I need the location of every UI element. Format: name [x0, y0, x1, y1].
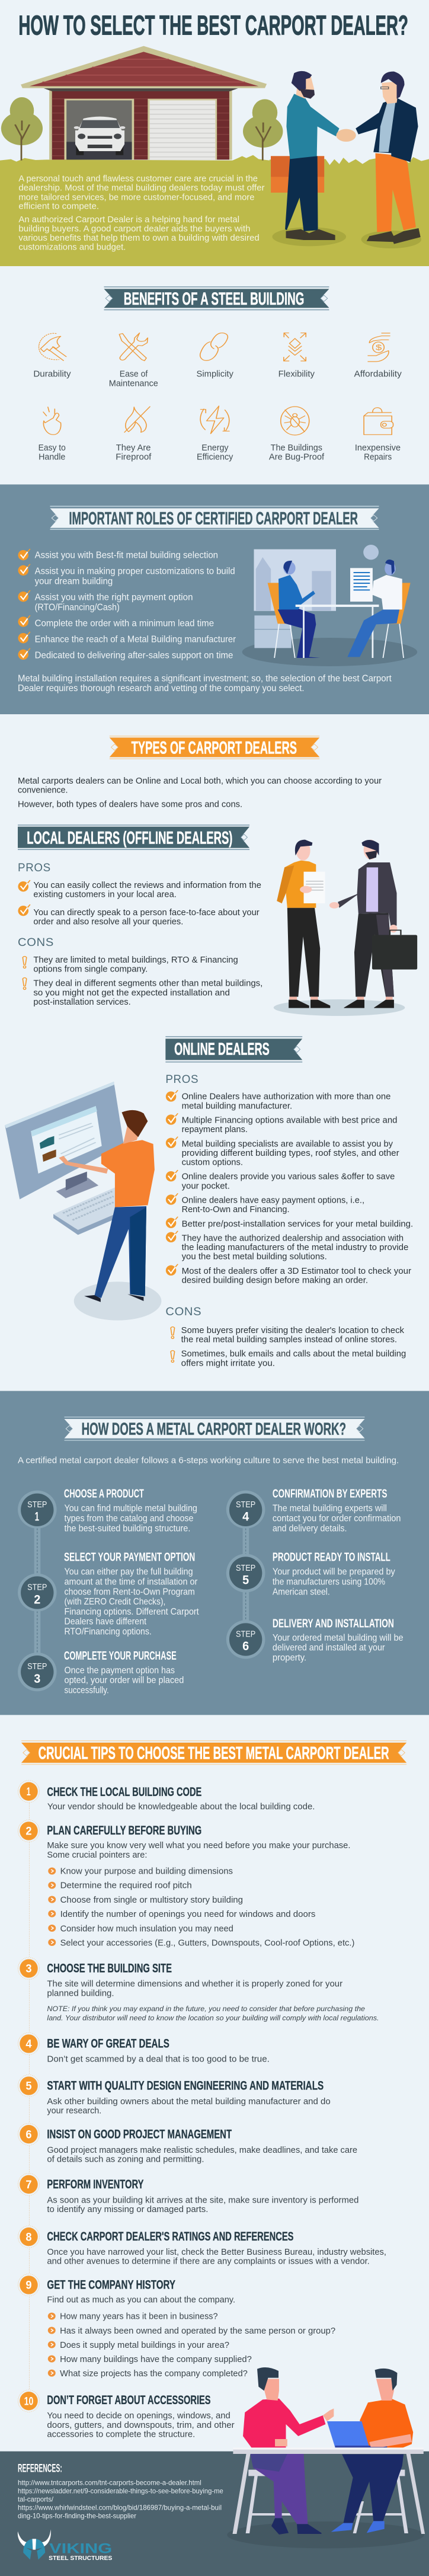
list: online pros: Online dealers have easy payment options, i.e.,	[182, 1195, 364, 1205]
list: local cons: options from single company.	[33, 964, 148, 974]
icon: office meeting	[242, 545, 417, 666]
tip 4: Don’t get scammed by a deal that is too good to be true.	[47, 2054, 270, 2064]
step text 4: and delivery details.	[273, 1523, 347, 1533]
stools	[246, 2470, 408, 2533]
text block: types intro	[18, 776, 382, 809]
list: online pros	[166, 1090, 413, 1285]
tip 10: 10	[24, 2395, 33, 2407]
step connectors	[34, 1527, 249, 1655]
tip 1	[18, 1781, 315, 1811]
icon: durability hammer	[39, 333, 66, 360]
tip 2: Some crucial pointers are:	[47, 1850, 147, 1859]
step badge 5: 5	[242, 1572, 249, 1587]
tip 9: How many years has it been in business?	[60, 2311, 218, 2321]
text block: reference links: https://www.whirlwindsteel.com/blog/bid/186987/buying-a-metal-buil	[18, 2504, 222, 2512]
labels: benefits: Repairs	[364, 452, 392, 462]
text block: intro: An authorized Carport Dealer is a helping hand for metal	[18, 215, 239, 224]
icon: affordability hands: $	[376, 343, 382, 352]
right person	[327, 2369, 413, 2533]
list: dealer roles: (RTO/Financing/Cash)	[35, 602, 120, 612]
tip 1: 1	[27, 1785, 31, 1798]
panel: hero scene	[0, 46, 429, 266]
text block: intro: building buyers. A good carport dealer aids the buyers with	[18, 223, 250, 234]
icon: fireproof	[124, 407, 150, 432]
tip 9: Does it supply metal buildings in your area?	[60, 2340, 229, 2350]
icon: no bugs	[281, 407, 309, 435]
labels: benefits: Inexpensive	[355, 443, 401, 452]
labels: benefits: Simplicity	[197, 369, 233, 379]
text block: intro: more tailored services, be more customer-focused, and more	[18, 192, 255, 202]
tip 8: 8	[25, 2230, 32, 2243]
panel: important roles	[0, 484, 429, 714]
panel: local dealers	[18, 824, 417, 1085]
tip 7: to identify any missing or damaged parts.	[47, 2204, 208, 2214]
icon: man in navy jacket	[356, 72, 421, 248]
logo: Viking Steel Structures: VIKING	[49, 2540, 112, 2556]
icon: garage building	[21, 46, 267, 159]
labels: benefits: Maintenance	[109, 378, 158, 388]
tip 5	[18, 2075, 331, 2115]
text block: reference links: https://newsladder.net/9-considerable-things-to-see-before-buying-me	[18, 2488, 223, 2495]
step text 6	[273, 1617, 404, 1663]
labels: benefits: Affordability	[354, 369, 402, 379]
step text 4	[273, 1487, 401, 1533]
left person	[243, 2367, 334, 2535]
list: online pros: custom options.	[182, 1157, 243, 1167]
list: dealer roles: Dedicated to delivering after-sales support on time	[35, 650, 233, 660]
list: local cons: post-installation services.	[33, 997, 131, 1006]
step badge 3	[18, 1653, 57, 1691]
icon: maintenance tools	[119, 333, 148, 361]
labels: benefits: Efficiency	[197, 452, 233, 462]
step text 1: the best-suited building structure.	[65, 1523, 190, 1533]
list: online pros: metal building manufacturer.	[182, 1101, 292, 1111]
step text 3	[64, 1650, 184, 1695]
heading: local cons: CONS	[18, 936, 54, 948]
step 2	[18, 1551, 199, 1637]
list: dealer roles: Complete the order with a minimum lead time	[35, 618, 214, 628]
icon: easy to handle	[43, 407, 61, 434]
list: local pros: You can easily collect the reviews and information from the	[33, 880, 261, 890]
tip 2: Identify the number of openings you need for windows and doors	[60, 1909, 315, 1919]
tip 10: doors, gutters, and downspouts, trim, and other	[47, 2420, 235, 2430]
step text 1	[64, 1487, 197, 1533]
tip 4: BE WARY OF GREAT DEALS	[47, 2035, 169, 2050]
icon: energy bolt	[200, 406, 229, 434]
step badge 5: STEP	[236, 1563, 255, 1573]
list: online pros: your pocket.	[182, 1181, 230, 1191]
heading banner: roles	[50, 506, 379, 530]
logo: Viking Steel Structures	[18, 2529, 112, 2561]
tip 10: DON’T FORGET ABOUT ACCESSORIES	[47, 2392, 211, 2407]
tip 9: GET THE COMPANY HISTORY	[47, 2277, 175, 2291]
step badge 1	[18, 1491, 57, 1529]
heading banner: benefits	[104, 286, 329, 310]
tip 6: of details such as zoning and permitting.	[47, 2154, 204, 2164]
step text 2: SELECT YOUR PAYMENT OPTION	[64, 1551, 195, 1564]
step text 3: successfully.	[65, 1685, 109, 1695]
list: dealer roles: Assist you with the right payment option	[35, 592, 193, 602]
tip 7: PERFORM INVENTORY	[47, 2177, 144, 2191]
list: local cons: They are limited to metal buildings, RTO & Financing	[33, 955, 238, 964]
list: online pros: Rent-to-Own and Financing.	[182, 1204, 290, 1214]
heading banner: online dealers: ONLINE DEALERS	[174, 1040, 270, 1059]
labels: benefits: Energy	[201, 443, 229, 452]
list: local pros: order and also resolve all your queries.	[33, 916, 183, 926]
labels: benefits: Ease of	[120, 369, 148, 379]
text block: intro	[18, 174, 265, 252]
labels: benefits: The Buildings	[271, 443, 322, 452]
step text 2: choose from Rent-to-Own Program	[65, 1586, 195, 1597]
heading: online cons: CONS	[165, 1305, 201, 1318]
text block: intro: dealership. Most of the metal building dealers today must offer	[18, 183, 265, 193]
text block: intro: A personal touch and flawless customer care are crucial in the	[18, 174, 258, 183]
icon: flexibility arrows	[284, 333, 306, 361]
list: online pros: you the best metal building solutions.	[182, 1251, 327, 1261]
icon: man at monitor	[5, 1082, 161, 1321]
labels: benefits	[33, 369, 402, 462]
step text 6: property.	[273, 1653, 306, 1663]
list: online pros: desired building design before making an order.	[182, 1275, 368, 1285]
icon: affordability hands	[368, 333, 390, 362]
icon row: line icons	[39, 333, 393, 435]
tip 9: Has it always been owned and operated by the same person or group?	[60, 2326, 335, 2335]
step text 2	[64, 1551, 199, 1637]
panel: types of carport dealers	[18, 736, 382, 809]
tip 2	[18, 1820, 354, 1948]
icon: two people at a table	[227, 2367, 425, 2548]
step text 1: types from the catalog and choose	[65, 1513, 193, 1523]
step text 2: You can either pay the full building	[65, 1567, 193, 1577]
list: online pros: repayment plans.	[182, 1124, 248, 1134]
tip 7: 7	[25, 2178, 32, 2191]
step text 3: Once the payment option has	[65, 1665, 175, 1675]
tip 5: Ask other building owners about the metal building manufacturer and do	[47, 2096, 331, 2106]
list: local cons	[23, 955, 262, 1006]
step badge 6: 6	[242, 1638, 249, 1653]
heading banner: local dealers	[18, 824, 249, 850]
panel: benefits of a steel building	[33, 286, 402, 462]
step badge 2: STEP	[27, 1582, 47, 1592]
heading: online pros: PROS	[165, 1073, 199, 1085]
tip 4	[18, 2032, 270, 2064]
icon: wallet	[364, 408, 393, 434]
step badge 1: STEP	[27, 1500, 47, 1509]
list: dealer roles	[18, 549, 236, 660]
step badge 6: STEP	[236, 1629, 255, 1639]
tip 3	[18, 1957, 379, 2022]
step 6	[226, 1617, 404, 1663]
text block: types intro: However, both types of dealers have some pros and cons.	[18, 799, 242, 809]
tip 10	[18, 2390, 235, 2439]
list: dealer roles: Assist you in making proper customizations to build	[35, 565, 235, 576]
text block: reference links: http://www.tntcarports.com/tnt-carports-become-a-dealer.html	[18, 2479, 201, 2487]
text block: reference links	[18, 2479, 223, 2520]
tip 7	[18, 2174, 358, 2214]
heading banner: how it works	[65, 1417, 364, 1441]
step 4	[226, 1487, 401, 1533]
step badge 2	[18, 1574, 57, 1612]
step 3	[18, 1650, 184, 1695]
tip 2: Determine the required roof pitch	[60, 1880, 192, 1890]
tip 10: You need to decide on openings, windows, and	[47, 2411, 230, 2420]
panel: how a dealer works: COMPLETE YOUR PURCHASE	[64, 1650, 177, 1663]
tip 6: 6	[25, 2128, 32, 2140]
tip 5: your research.	[47, 2105, 101, 2115]
labels: benefits: Flexibility	[278, 369, 315, 379]
panel: crucial tips	[18, 1740, 406, 2439]
panel: footer	[0, 2367, 429, 2576]
text block: selection note	[18, 673, 392, 693]
tip 10: accessories to complete the structure.	[47, 2429, 195, 2439]
tip 9	[18, 2274, 335, 2378]
tip 2: 2	[25, 1824, 32, 1837]
text block: intro: efficient to compete.	[18, 201, 99, 211]
step badge 3: 3	[34, 1671, 40, 1686]
step 5	[226, 1551, 395, 1597]
logo: Viking Steel Structures: STEEL STRUCTURES	[49, 2555, 112, 2561]
text block: intro: customizations and budget.	[18, 242, 126, 252]
tip 6: INSIST ON GOOD PROJECT MANAGEMENT	[47, 2127, 232, 2142]
tip 3: CHOOSE THE BUILDING SITE	[47, 1960, 172, 1975]
labels: benefits: Durability	[33, 369, 71, 379]
step text 3: opted, your order will be placed	[65, 1675, 184, 1685]
icon: two businessmen	[274, 840, 417, 1016]
tip 2: Consider how much insulation you may need	[60, 1923, 233, 1933]
step badge 3: STEP	[27, 1661, 47, 1671]
tip 3: 3	[25, 1962, 32, 1975]
step text 2: Dealers have different	[65, 1616, 147, 1626]
step text 2: (with ZERO Credit Checks),	[65, 1596, 165, 1606]
list: local pros: existing customers in your local area.	[33, 889, 177, 899]
tip 9: 9	[25, 2278, 32, 2291]
list: dealer roles: Enhance the reach of a Metal Building manufacturer	[35, 634, 236, 644]
text block: reference links: ding-10-tips-for-finding-the-best-supplier	[18, 2512, 136, 2520]
heading banner: online dealers	[165, 1036, 302, 1062]
labels: benefits: Fireproof	[116, 452, 151, 462]
panel: how a dealer works	[0, 1391, 429, 1715]
icon: bearded man with briefcase	[271, 71, 356, 246]
tip 2: PLAN CAREFULLY BEFORE BUYING	[47, 1823, 201, 1837]
text block: intro: various benefits that help them to own a building with desired	[18, 233, 260, 242]
step badge 4	[226, 1491, 265, 1529]
tip 3: planned building.	[47, 1988, 114, 1998]
labels: benefits: Are Bug-Proof	[269, 452, 324, 462]
text block: types intro: convenience.	[18, 785, 68, 795]
step text 1: CHOOSE A PRODUCT	[64, 1487, 144, 1501]
text block: reference links: tal-carports/	[18, 2496, 54, 2504]
heading: local pros: PROS	[18, 861, 51, 874]
step badge 4: 4	[242, 1509, 249, 1524]
text block: selection note: Dealer requires thorough research and vetting of the company you select.	[18, 683, 304, 693]
list: online cons: offers might irritate you.	[181, 1358, 275, 1368]
step badge 2: 2	[34, 1591, 40, 1606]
tip 4: 4	[25, 2037, 32, 2050]
step badge 6	[226, 1620, 265, 1659]
icon: left tree	[1, 97, 43, 161]
tip 2: Choose from single or multistory story building	[60, 1895, 243, 1904]
list: online cons	[171, 1325, 406, 1368]
step badge 5	[226, 1554, 265, 1593]
tip 6	[18, 2123, 357, 2164]
panel: footer: REFERENCES:	[18, 2462, 62, 2475]
table	[232, 2447, 425, 2534]
labels: benefits: Easy to	[39, 443, 66, 452]
step text 5: American steel.	[273, 1586, 330, 1597]
step text 5	[273, 1551, 395, 1597]
tip 1: Your vendor should be knowledgeable about the local building code.	[47, 1801, 315, 1811]
tip 1: CHECK THE LOCAL BUILDING CODE	[47, 1784, 201, 1799]
list: dealer roles: your dream building	[35, 576, 113, 586]
step badge 4: STEP	[236, 1500, 255, 1509]
tip 9: Find out as much as you can about the company.	[47, 2294, 235, 2305]
step badge 1: 1	[35, 1509, 39, 1524]
step text 2: Financing options. Different Carport	[65, 1606, 199, 1616]
step text 1: You can find multiple metal building	[65, 1503, 197, 1513]
icon: chain link	[200, 333, 228, 360]
icon: white car	[74, 117, 125, 155]
timeline dotted line	[28, 1803, 30, 2396]
tip 8	[18, 2226, 386, 2266]
list: local cons: They deal in different segments other than metal buildings,	[33, 978, 262, 988]
tip 9: What size projects has the company completed?	[60, 2369, 248, 2378]
heading banner: types	[110, 736, 319, 759]
step text 2: amount at the time of installation or	[65, 1576, 197, 1587]
panel: online dealers	[5, 1082, 413, 1368]
green ground	[0, 155, 429, 266]
icon: right tree	[243, 99, 283, 161]
list: local cons: so you might not get the expected installation and	[33, 987, 230, 998]
tip 5: 5	[25, 2079, 32, 2092]
list: local pros	[18, 880, 261, 926]
labels: benefits: They Are	[116, 443, 151, 452]
step 1	[18, 1487, 197, 1533]
labels: benefits: Handle	[39, 452, 65, 462]
tip 9: How many buildings have the company supplied?	[60, 2354, 252, 2364]
tip 2: Know your purpose and building dimensions	[60, 1866, 233, 1876]
list: dealer roles: Assist you with Best-fit metal building selection	[35, 549, 218, 560]
step text 2: RTO/Financing options.	[65, 1626, 152, 1637]
list: local pros: You can directly speak to a person face-to-face about your	[33, 907, 260, 917]
